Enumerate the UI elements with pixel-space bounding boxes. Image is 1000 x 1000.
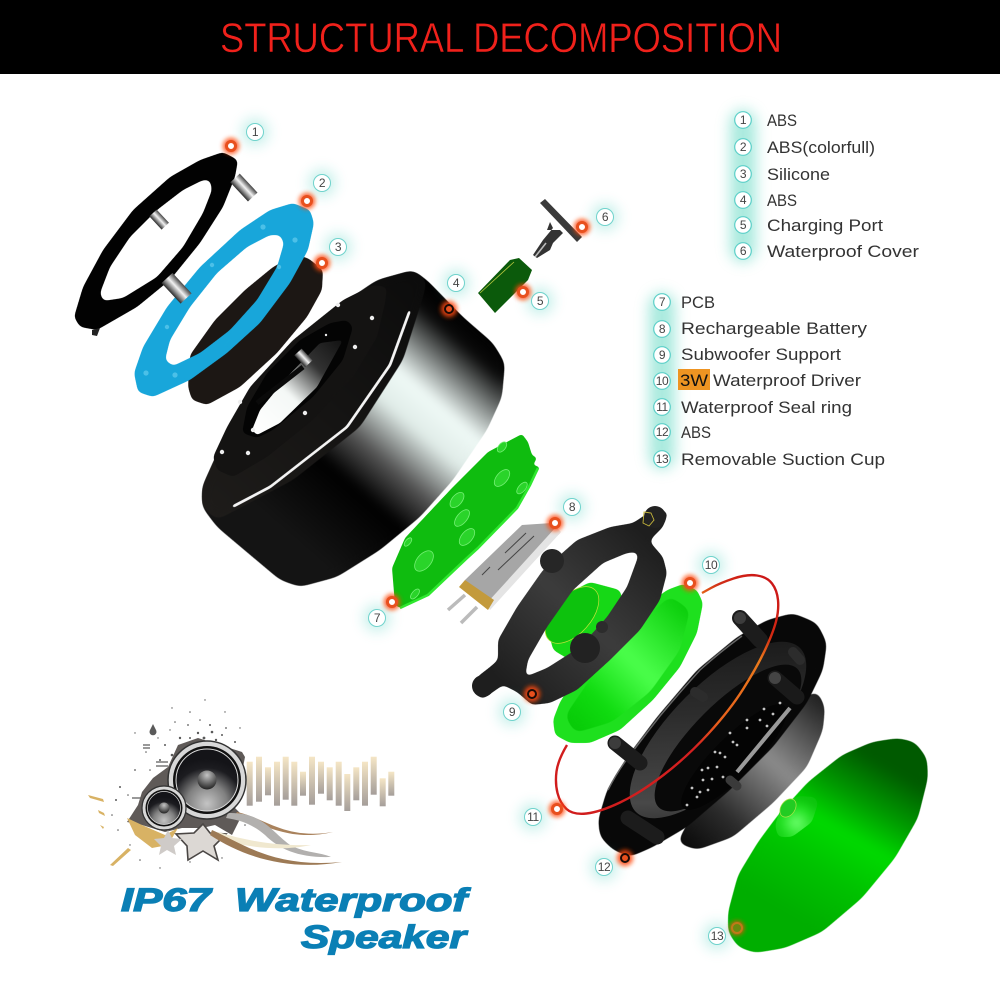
part callouts: 11 (527, 810, 540, 824)
3W highlight (678, 369, 710, 390)
stars (176, 824, 226, 860)
legend: parts 7 to 13: 12 (656, 425, 669, 439)
part 2: blue ABS ring (134, 203, 314, 397)
ink splatter (111, 699, 251, 869)
part callouts: 2 (319, 176, 326, 190)
legend: parts 1 to 6: ABS(colorfull) (767, 138, 875, 157)
splash blob (127, 738, 245, 835)
small speaker (142, 786, 186, 830)
logo text (121, 882, 472, 955)
legend: parts 1 to 6: 2 (740, 140, 747, 154)
pegs on rear housing (609, 612, 800, 837)
legend: parts 7 to 13: 9 (659, 348, 666, 362)
legend: parts 7 to 13 (649, 293, 885, 469)
legend: parts 7 to 13: 13 (656, 452, 669, 466)
legend: parts 1 to 6: Silicone (767, 165, 830, 184)
legend: parts 7 to 13: Waterproof Seal ring (681, 398, 852, 417)
part 5: charging port (478, 258, 532, 313)
part callouts: 5 (537, 294, 544, 308)
legend: parts 1 to 6: 5 (740, 218, 747, 232)
part callouts (223, 119, 744, 949)
legend: parts 7 to 13: Waterproof Driver (713, 371, 861, 390)
legend: parts 7 to 13: 7 (659, 295, 666, 309)
part callouts: 7 (374, 611, 381, 625)
legend: parts 7 to 13: 3W (680, 371, 708, 390)
legend: parts 1 to 6: Charging Port (767, 216, 883, 235)
legend: parts 7 to 13: PCB (681, 293, 715, 312)
part 13: removable suction cup (728, 738, 928, 953)
legend: parts 1 to 6: 4 (740, 193, 747, 207)
legend: parts 7 to 13: 10 (656, 374, 669, 388)
part callouts: 4 (453, 276, 460, 290)
legend: parts 1 to 6: ABS (767, 191, 797, 210)
legend: parts 1 to 6: 3 (740, 167, 747, 181)
legend: parts 7 to 13: Rechargeable Battery (681, 319, 868, 338)
part callouts: 10 (705, 558, 718, 572)
ribbons (235, 812, 333, 835)
legend: parts 1 to 6: Waterproof Cover (767, 242, 919, 261)
part 7: PCB (392, 434, 540, 608)
part 10: 3W waterproof driver (535, 577, 703, 743)
legend: parts 1 to 6: 6 (740, 244, 747, 258)
part callouts: 1 (252, 125, 259, 139)
logo text: Speaker (301, 919, 468, 955)
part 12: rear housing (598, 612, 833, 857)
big speaker (168, 741, 246, 819)
legend: parts 7 to 13: 8 (659, 322, 666, 336)
legend: parts 7 to 13: ABS (681, 423, 711, 442)
title: STRUCTURAL DECOMPOSITION (220, 14, 782, 61)
logo: speaker splash artwork (88, 699, 394, 869)
legend: parts 1 to 6: ABS (767, 111, 797, 130)
sound bars (247, 757, 394, 811)
part callouts: 12 (598, 860, 611, 874)
legend: parts 7 to 13: 11 (656, 400, 669, 414)
part 1: black ABS ring with pins (74, 152, 257, 336)
part callouts: 9 (509, 705, 516, 719)
legend: parts 1 to 6: 1 (740, 113, 747, 127)
part 3: silicone gasket (188, 255, 323, 405)
legend: parts 7 to 13: Removable Suction Cup (681, 450, 885, 469)
title banner (0, 0, 1000, 74)
part 11: waterproof seal ring (556, 575, 778, 814)
part 4: main speaker body (202, 270, 505, 587)
part callouts: 13 (711, 929, 724, 943)
part 8: rechargeable battery (448, 523, 561, 623)
legend: parts 1 to 6 (730, 110, 919, 262)
part callouts: 6 (602, 210, 609, 224)
legend: parts 7 to 13: Subwoofer Support (681, 345, 841, 364)
part callouts: 3 (335, 240, 342, 254)
part 9: subwoofer support (472, 506, 668, 705)
part callouts: 8 (569, 500, 576, 514)
logo text: IP67 Waterproof (121, 882, 472, 918)
gold splash (88, 795, 178, 866)
part 6: waterproof cover (533, 199, 582, 258)
